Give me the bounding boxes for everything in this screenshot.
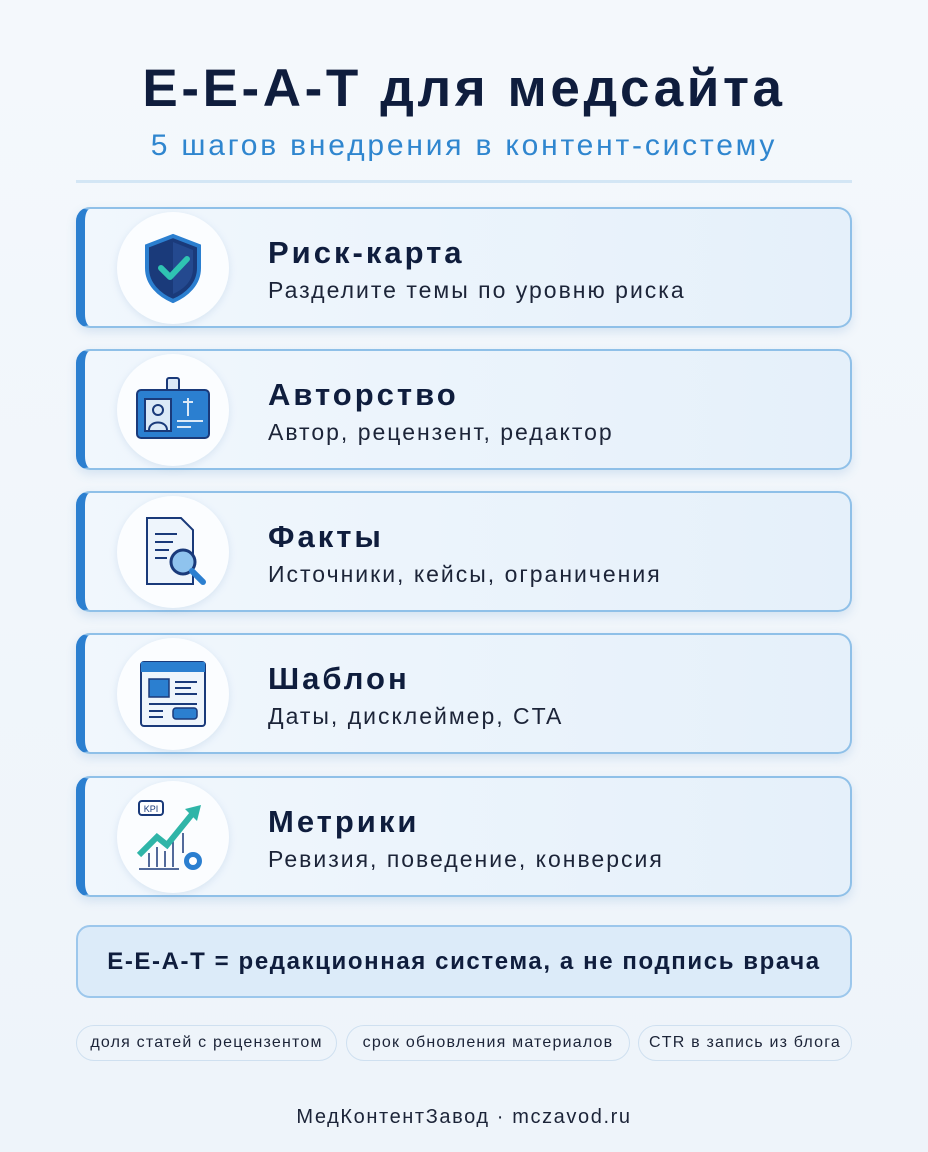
pill: reviewer share xyxy=(76,1025,337,1061)
icon: KPI chart: KPI xyxy=(144,804,158,814)
icon: page template xyxy=(117,638,229,750)
text: Автор, рецензент, редактор xyxy=(268,419,614,445)
pill: CTR xyxy=(638,1025,852,1061)
icon: document magnifier xyxy=(117,496,229,608)
card: facts xyxy=(76,491,852,612)
text: Даты, дисклеймер, CTA xyxy=(268,703,563,729)
card: metrics xyxy=(76,776,852,897)
card: template xyxy=(76,633,852,754)
footer: МедКонтентЗавод · mczavod.ru xyxy=(296,1106,632,1128)
card: authorship xyxy=(76,349,852,470)
pill: CTR: CTR в запись из блога xyxy=(649,1034,841,1051)
heading: Факты xyxy=(268,519,384,554)
heading: Авторство xyxy=(268,377,459,412)
icon: KPI chart xyxy=(117,781,229,893)
heading: Риск-карта xyxy=(268,235,465,270)
text: Источники, кейсы, ограничения xyxy=(268,561,662,587)
callout banner xyxy=(76,925,852,998)
text: Разделите темы по уровню риска xyxy=(268,277,686,303)
pill: reviewer share: доля статей с рецензентом xyxy=(90,1034,323,1051)
pill: update term: срок обновления материалов xyxy=(363,1034,613,1051)
title: E-E-A-T для медсайта xyxy=(142,59,786,118)
icon: badge xyxy=(117,354,229,466)
pill: update term xyxy=(346,1025,630,1061)
card: risk map xyxy=(76,207,852,328)
subtitle: 5 шагов внедрения в контент-систему xyxy=(151,129,777,162)
icon: shield xyxy=(117,212,229,324)
heading: Метрики xyxy=(268,804,419,839)
text: Ревизия, поведение, конверсия xyxy=(268,846,664,872)
heading: Шаблон xyxy=(268,661,410,696)
callout banner: E-E-A-T = редакционная система, а не подпись врача xyxy=(107,948,821,975)
